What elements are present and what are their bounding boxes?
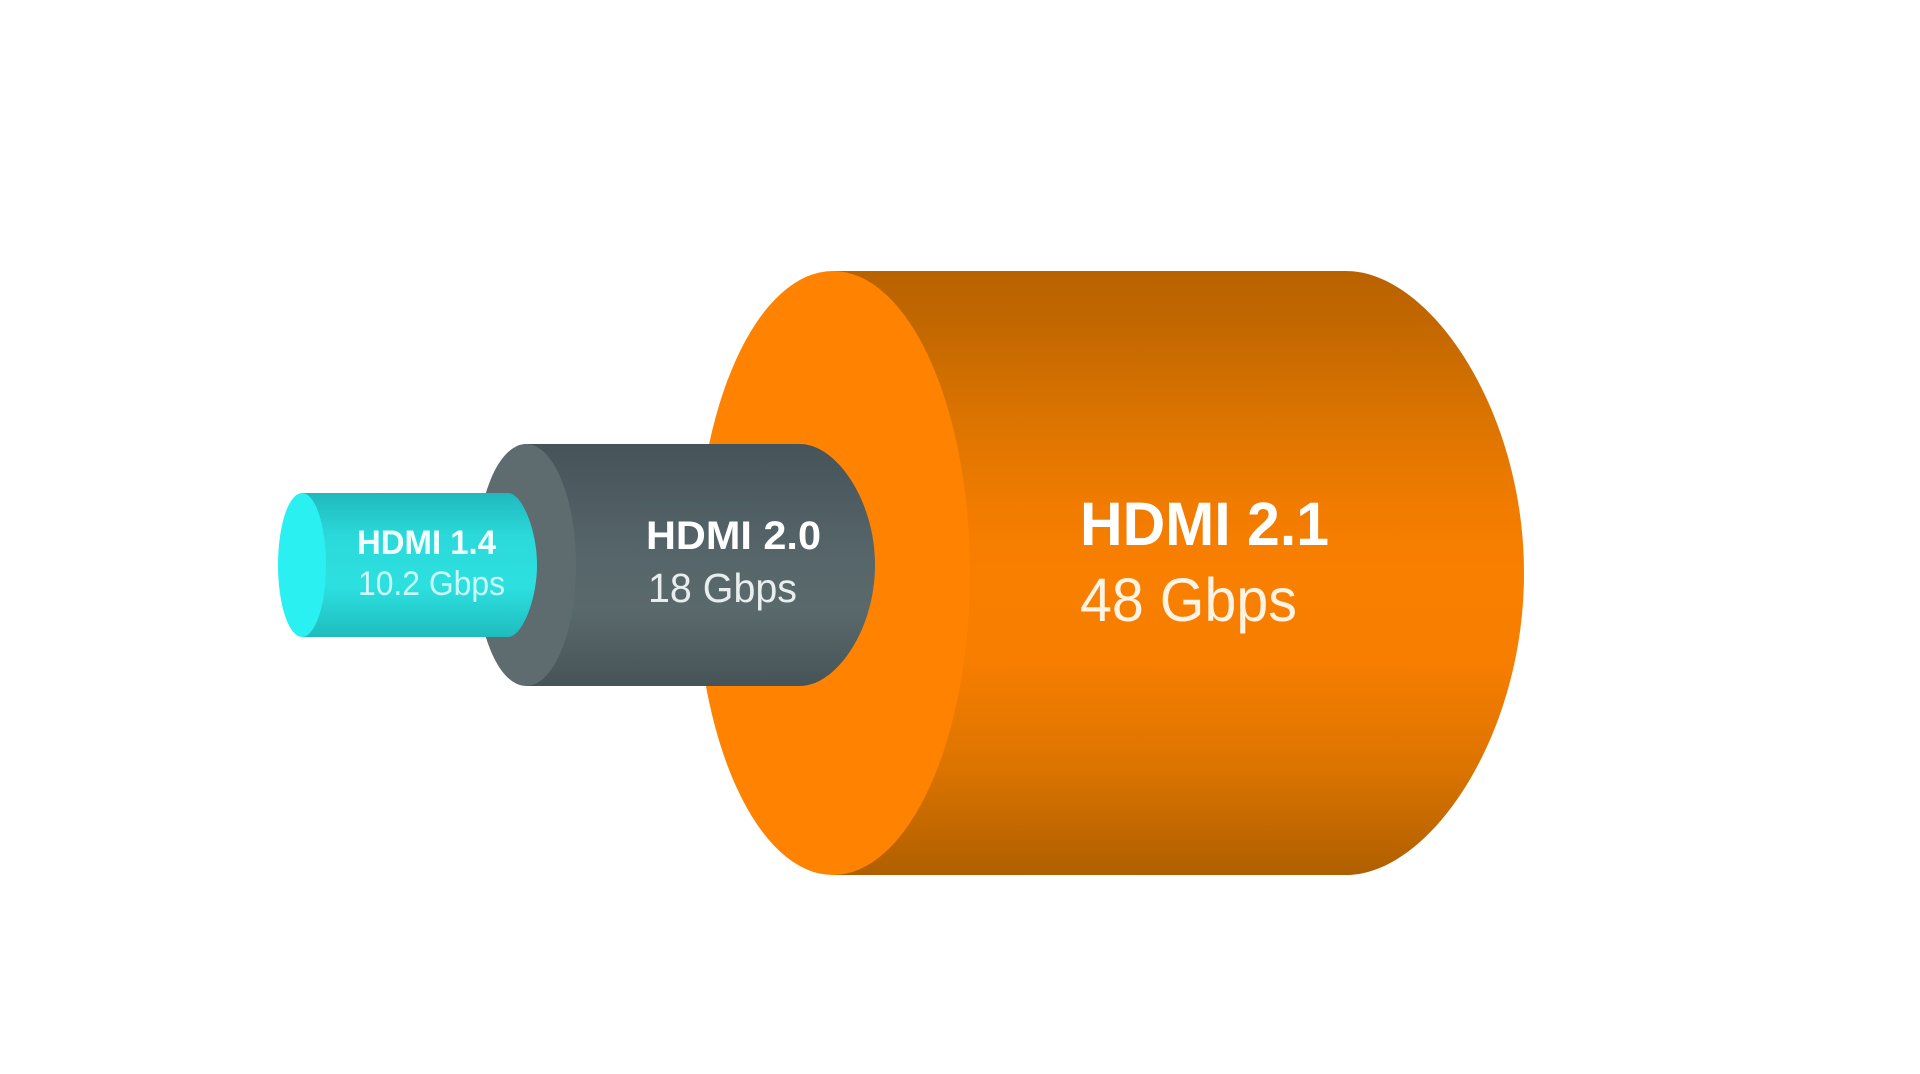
label: HDMI 2.0: HDMI 2.0 <box>646 514 821 558</box>
grey cylinder front face <box>476 444 576 686</box>
label: HDMI 2.0 <box>646 514 821 611</box>
label: HDMI 1.4: HDMI 1.4 <box>357 524 496 562</box>
HDMI 1.4 cylinder <box>278 493 537 637</box>
cyan cylinder side <box>302 493 537 637</box>
label: HDMI 2.1: 48 Gbps <box>1080 566 1297 634</box>
label: HDMI 2.0: 18 Gbps <box>648 565 797 611</box>
HDMI 2.0 cylinder <box>476 444 875 686</box>
grey cylinder side <box>526 444 875 686</box>
orange cylinder front face <box>696 271 970 875</box>
label: HDMI 1.4: 10.2 Gbps <box>358 565 505 603</box>
cyan cylinder front face <box>278 493 326 637</box>
label: HDMI 2.1 <box>1080 490 1329 634</box>
orange cylinder side <box>834 271 1524 875</box>
label: HDMI 2.1: HDMI 2.1 <box>1080 490 1329 558</box>
HDMI 2.1 cylinder <box>696 271 1524 875</box>
label: HDMI 1.4 <box>357 524 505 603</box>
